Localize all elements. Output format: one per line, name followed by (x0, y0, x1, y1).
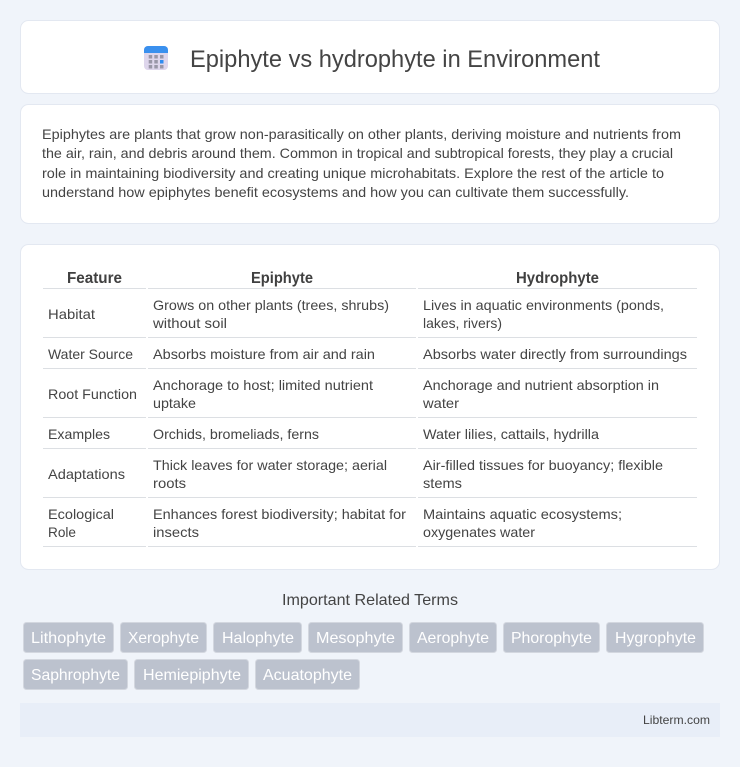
row: Ecological Role: Role (48, 524, 76, 540)
row: Adaptations: Thick leaves for water storage; aerial (153, 457, 387, 473)
row: Water Source: Absorbs moisture from air and rain (153, 346, 375, 362)
panel: introduction text (20, 104, 720, 224)
row: Ecological Role: insects (153, 524, 199, 540)
row: Water Source (43, 346, 697, 369)
footer (20, 703, 720, 737)
related term tags (24, 622, 704, 690)
table header row: Hydrophyte (516, 270, 599, 287)
table header row: Epiphyte (251, 270, 313, 287)
related term tags: Lithophyte (31, 630, 106, 647)
panel: introduction text: role in maintaining biodiversity and creating unique microhabitats. Explore the rest of the article to (42, 165, 664, 181)
row: Ecological Role: Ecological (48, 506, 114, 522)
panel: comparison table (20, 244, 720, 570)
related term tags: Saphrophyte (31, 667, 120, 684)
row: Root Function: Root Function (48, 386, 137, 402)
row: Habitat (43, 297, 697, 338)
row: Water Source: Absorbs water directly from surroundings (423, 346, 687, 362)
panel: introduction text: understand how epiphytes benefit ecosystems and how you can cultivate them successfully. (42, 184, 629, 200)
row: Adaptations: roots (153, 475, 186, 491)
row: Root Function: water (422, 395, 459, 411)
icon: calendar (144, 46, 168, 70)
related term tags: Aerophyte (417, 630, 489, 647)
row: Examples (43, 426, 697, 449)
related term tags: Mesophyte (316, 630, 395, 647)
row: Ecological Role (43, 506, 697, 547)
row: Root Function: uptake (153, 395, 196, 411)
row: Habitat: Lives in aquatic environments (ponds, (423, 297, 664, 313)
panel: introduction text: the air, rain, and debris around them. Common in tropical and subtropical forests, they play a crucial (42, 145, 673, 161)
row: Examples: Examples (48, 426, 110, 442)
row: Examples: Orchids, bromeliads, ferns (153, 426, 319, 442)
row: Root Function: Anchorage and nutrient absorption in (423, 377, 659, 393)
row: Water Source: Water Source (48, 346, 133, 362)
related term tags: Hygrophyte (615, 630, 696, 647)
title: Epiphyte vs hydrophyte in Environment (190, 46, 600, 73)
related term tags: Hemiepiphyte (143, 667, 241, 684)
row: Adaptations: Adaptations (48, 466, 125, 482)
row: Adaptations: stems (423, 475, 462, 491)
row: Root Function: Anchorage to host; limited nutrient (153, 377, 373, 393)
footer: Libterm.com (643, 713, 710, 727)
row: Examples: Water lilies, cattails, hydrilla (423, 426, 599, 442)
table header row (43, 270, 697, 289)
row: Habitat: Habitat (48, 306, 95, 322)
row: Adaptations (43, 457, 697, 498)
row: Habitat: lakes, rivers) (423, 315, 502, 331)
related term tags: Halophyte (222, 630, 294, 647)
row: Ecological Role: Enhances forest biodiversity; habitat for (153, 506, 406, 522)
row: Root Function (43, 377, 697, 418)
row: Ecological Role: oxygenates water (423, 524, 535, 540)
related term tags: Acuatophyte (263, 667, 352, 684)
row: Adaptations: Air-filled tissues for buoyancy; flexible (423, 457, 663, 473)
row: Ecological Role: Maintains aquatic ecosystems; (423, 506, 622, 522)
related term tags: Phorophyte (511, 630, 592, 647)
panel: introduction text: Epiphytes are plants that grow non-parasitically on other plants, deriving moisture and nutrients from (42, 126, 681, 142)
table header row: Feature (67, 270, 122, 287)
header panel (20, 20, 720, 94)
row: Habitat: without soil (152, 315, 227, 331)
row: Habitat: Grows on other plants (trees, shrubs) (153, 297, 389, 313)
related term tags: Xerophyte (128, 630, 199, 647)
heading: related terms: Important Related Terms (282, 592, 458, 609)
